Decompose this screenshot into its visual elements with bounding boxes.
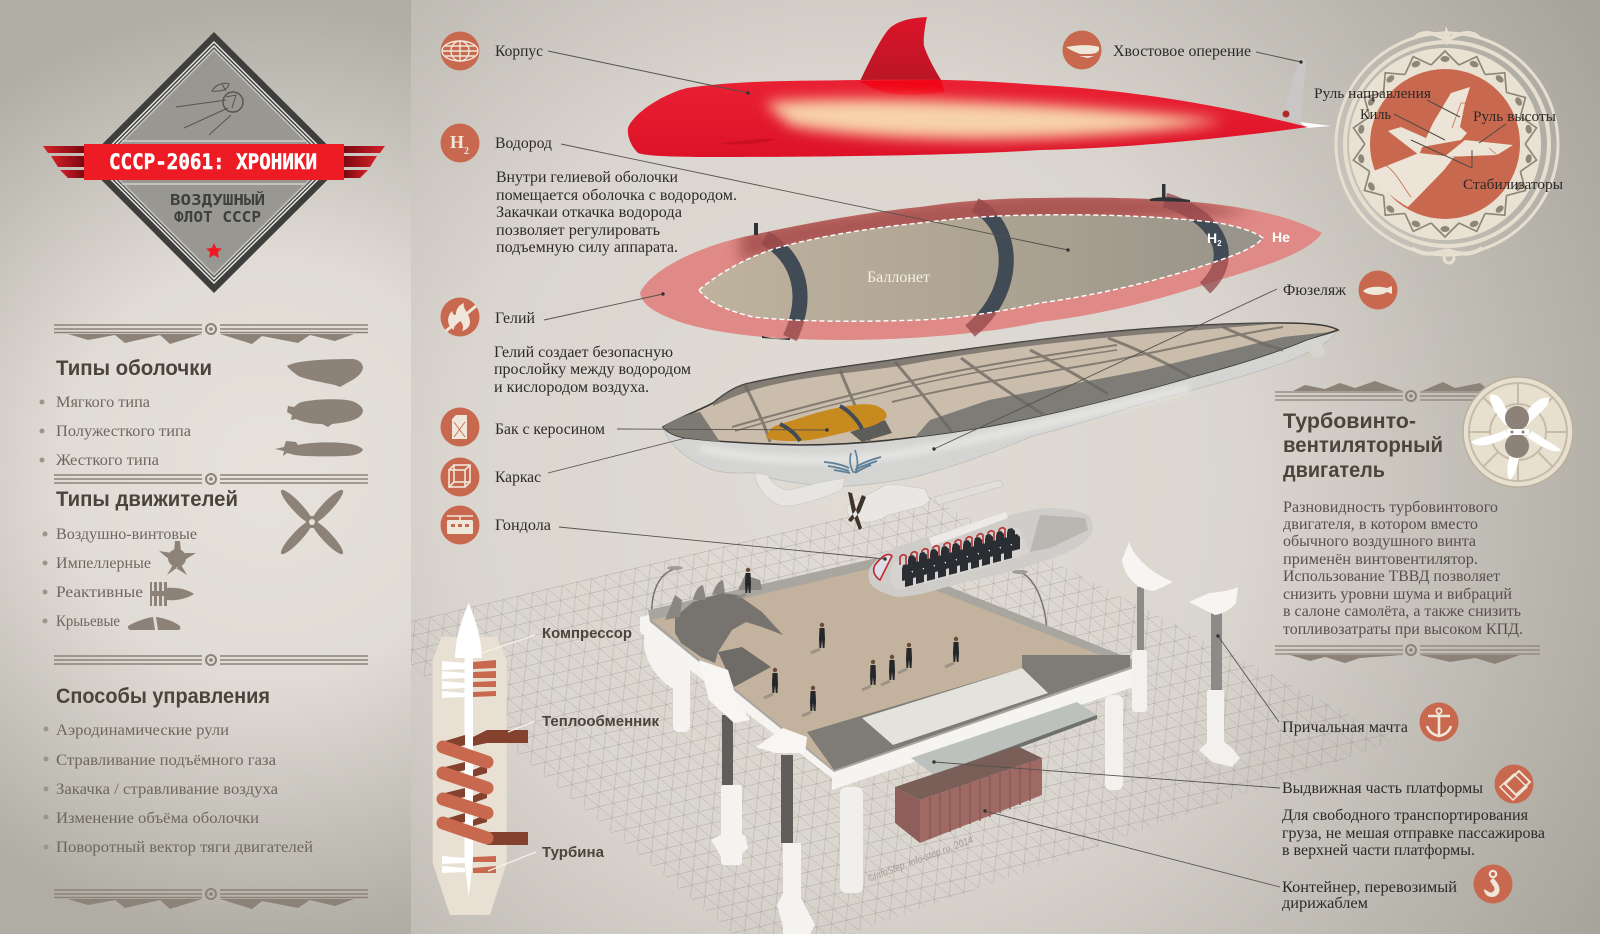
illustration: balloon envelope bbox=[640, 184, 1322, 340]
ballonet bbox=[699, 215, 1263, 321]
stern stub bbox=[1308, 344, 1325, 358]
heading: Турбовинто- bbox=[1283, 410, 1416, 433]
list: envelope types: Мягкого типа bbox=[56, 394, 150, 411]
subtitle: ВОЗДУШНЫЙ bbox=[170, 190, 265, 209]
description: Использование ТВВД позволяет bbox=[1283, 568, 1500, 585]
icon: red star bbox=[206, 243, 222, 258]
far-side mast heads bbox=[699, 660, 750, 723]
divider 3 bbox=[54, 655, 368, 665]
description: в салоне самолёта, а также снизить bbox=[1283, 603, 1521, 620]
floor bbox=[652, 567, 1130, 770]
people bbox=[737, 568, 959, 716]
leader lines bbox=[544, 51, 1301, 887]
callout: frame: Каркас bbox=[495, 469, 541, 486]
fin bbox=[860, 17, 941, 84]
icon: wing bbox=[128, 617, 180, 630]
callout: gondola bbox=[440, 506, 551, 544]
callout: hydrogen: Водород bbox=[495, 135, 552, 152]
diagram: engine scheme bbox=[433, 603, 659, 915]
white blades bbox=[442, 661, 465, 873]
description: двигателя, в котором вместо bbox=[1283, 516, 1478, 533]
envelope top shade bbox=[740, 192, 1250, 262]
list: propulsion types: Воздушно-винтовые bbox=[56, 526, 197, 543]
divider 1 bbox=[54, 324, 368, 344]
leader dots bbox=[661, 60, 1303, 813]
callout: helium: прослойку между водородом bbox=[494, 361, 691, 378]
icon: jet bbox=[150, 582, 194, 606]
callout: extendable platform: Для свободного транспортирования bbox=[1282, 807, 1528, 824]
icon: impeller bbox=[159, 541, 196, 575]
engine nacelle bbox=[847, 485, 930, 522]
escalator arches bbox=[665, 575, 762, 620]
illustration: platform bbox=[640, 542, 1240, 934]
label: H2: H bbox=[1207, 230, 1217, 246]
gondola bbox=[868, 508, 1093, 597]
callout: container bbox=[1282, 864, 1512, 912]
callout: mooring mast: Причальная мачта bbox=[1282, 719, 1408, 736]
zigzag ring bbox=[1351, 51, 1539, 237]
callout: fuselage bbox=[1283, 270, 1398, 310]
container bbox=[895, 746, 1042, 843]
badge labels: Руль направления bbox=[1314, 86, 1431, 102]
illustration: outer red hull bbox=[628, 17, 1331, 157]
badge labels: Руль высоты bbox=[1473, 109, 1556, 125]
callout: hydrogen: помещается оболочка с водородом. bbox=[496, 187, 737, 204]
hull highlight bbox=[765, 99, 1225, 139]
panel: turbofan engine bbox=[1275, 377, 1573, 664]
icon: propfan bbox=[1463, 377, 1573, 487]
ribbon bbox=[84, 144, 344, 180]
callout: helium: и кислородом воздуха. bbox=[494, 379, 649, 396]
emblem: diamond badge bbox=[43, 32, 385, 293]
description: Разновидность турбовинтового bbox=[1283, 499, 1498, 516]
mooring mast 2 bbox=[1211, 613, 1222, 693]
callout: hydrogen bbox=[440, 124, 737, 256]
fin shadow bbox=[860, 80, 945, 95]
list: envelope types: Полужесткого типа bbox=[56, 423, 191, 440]
hull shading bbox=[700, 388, 1190, 460]
callout: hydrogen: H bbox=[450, 132, 464, 152]
icon: semi-rigid airship bbox=[287, 399, 363, 427]
small pod bbox=[934, 480, 1004, 505]
callout: helium: Гелий bbox=[495, 310, 535, 327]
ribbon wings bbox=[43, 146, 385, 178]
rear leg bbox=[673, 660, 690, 732]
list: control methods: Стравливание подъёмного газа bbox=[56, 752, 276, 769]
fuel tank bbox=[766, 404, 892, 442]
description: снизить уровни шума и вибраций bbox=[1283, 586, 1512, 603]
divider 2 bbox=[54, 474, 368, 484]
platform slab edge bbox=[640, 560, 1142, 790]
tail fin bbox=[1283, 58, 1306, 122]
callout: extendable platform: Выдвижная часть платформы bbox=[1282, 780, 1484, 797]
icon: rigid airship bbox=[275, 441, 363, 456]
icon: soft airship bbox=[287, 359, 363, 387]
callout: kerosene tank: Бак с керосином bbox=[495, 421, 605, 438]
list: propulsion types: Крыьевые bbox=[56, 613, 120, 630]
list: envelope types bbox=[40, 394, 191, 469]
extendable slab bbox=[911, 702, 1097, 775]
callout lines bbox=[482, 635, 536, 871]
hull seam bbox=[720, 139, 778, 145]
ground grid bbox=[371, 497, 1398, 934]
list: control methods: Закачка / стравливание воздуха bbox=[56, 781, 278, 798]
heading: control methods: Способы управления bbox=[56, 685, 270, 708]
callout: container: Контейнер, перевозимый bbox=[1282, 879, 1457, 896]
badge: tail assembly bbox=[1314, 26, 1563, 263]
callout: extendable platform: в верхней части платформы. bbox=[1282, 842, 1475, 859]
masts bbox=[699, 542, 1240, 934]
heading bbox=[1283, 410, 1443, 482]
heat exchanger back bbox=[445, 735, 487, 826]
callout: frame bbox=[440, 458, 541, 496]
list: control methods bbox=[44, 722, 313, 856]
belts over ballonet bbox=[770, 216, 1229, 320]
propeller bbox=[848, 492, 866, 530]
badge leaders bbox=[1394, 100, 1506, 168]
callout: fuselage: Фюзеляж bbox=[1283, 282, 1346, 299]
callout: hull bbox=[440, 32, 543, 70]
label: turbine: Турбина bbox=[542, 844, 605, 861]
description: топливозатраты при высоком КПД. bbox=[1283, 621, 1523, 638]
list: propulsion types bbox=[42, 526, 197, 630]
divider top bbox=[1275, 381, 1490, 401]
label: heat exchanger: Теплообменник bbox=[542, 713, 659, 730]
callout: hydrogen: 2 bbox=[464, 146, 469, 157]
plane tail bbox=[1371, 87, 1513, 207]
heading: propulsion types: Типы движителей bbox=[56, 488, 238, 511]
description: применён винтовентилятор. bbox=[1283, 551, 1478, 568]
callout: hydrogen: подъемную силу аппарата. bbox=[496, 239, 678, 256]
callout: container: дирижаблем bbox=[1282, 895, 1368, 912]
shaft bbox=[455, 603, 482, 897]
callout: mooring mast bbox=[1282, 702, 1458, 742]
list: propulsion types: Импеллерные bbox=[56, 555, 151, 572]
far lamps bbox=[652, 568, 1047, 648]
description: обычного воздушного винта bbox=[1283, 533, 1476, 550]
description bbox=[1283, 499, 1523, 638]
hull body bbox=[628, 79, 1308, 157]
cargo opening bbox=[862, 668, 1048, 745]
icon: propeller bbox=[278, 487, 346, 557]
white hull bbox=[663, 323, 1338, 487]
callout: gondola: Гондола bbox=[495, 517, 551, 534]
gear arm bbox=[755, 473, 845, 506]
callout: helium bbox=[440, 298, 691, 396]
panel: main background bbox=[411, 0, 1600, 934]
subtitle: ФЛОТ СССР bbox=[174, 208, 261, 226]
belts over helium bbox=[765, 200, 1221, 338]
list: control methods: Аэродинамические рули bbox=[56, 722, 229, 739]
label: He: He bbox=[1272, 229, 1290, 245]
coil bbox=[443, 747, 487, 838]
divider bottom bbox=[1275, 645, 1540, 664]
seats bbox=[900, 528, 1020, 587]
callout: kerosene tank bbox=[440, 408, 605, 446]
leg front bbox=[840, 787, 863, 893]
callout: hydrogen: позволяет регулировать bbox=[496, 222, 660, 239]
canopy bbox=[675, 593, 783, 663]
canopy shadow bbox=[718, 647, 771, 687]
top mounts bbox=[754, 184, 1190, 340]
frame ribs bbox=[732, 327, 1283, 442]
list: control methods: Поворотный вектор тяги двигателей bbox=[56, 839, 313, 856]
badge labels: Стабилизаторы bbox=[1463, 177, 1563, 193]
illustration: fuselage bbox=[663, 323, 1338, 597]
panel: left sidebar bbox=[0, 0, 411, 934]
heading: двигатель bbox=[1283, 459, 1385, 482]
callout: hydrogen: Внутри гелиевой оболочки bbox=[496, 169, 678, 186]
tail plane bbox=[1300, 122, 1331, 128]
callout: tail: Хвостовое оперение bbox=[1113, 43, 1251, 60]
list: propulsion types: Реактивные bbox=[56, 584, 143, 601]
list: control methods: Изменение объёма оболочки bbox=[56, 810, 259, 827]
badge labels bbox=[1314, 86, 1563, 193]
callout: tail bbox=[1062, 30, 1251, 70]
mooring mast 1 bbox=[1137, 587, 1144, 652]
subtitle bbox=[170, 190, 265, 226]
interior shadow bbox=[915, 332, 1330, 437]
list: envelope types: Жесткого типа bbox=[56, 452, 159, 469]
icon: sputnik bbox=[176, 83, 243, 135]
title: СССР-2061: ХРОНИКИ bbox=[109, 150, 317, 174]
copyright: ©InfoStep, info-step.ru, 2014 bbox=[866, 834, 975, 885]
divider 4 bbox=[54, 889, 368, 909]
red blades bbox=[473, 660, 496, 873]
leg right bbox=[1105, 695, 1123, 790]
floor shadow bbox=[807, 655, 1130, 770]
callout: extendable platform bbox=[1282, 764, 1545, 859]
heading: вентиляторный bbox=[1283, 434, 1443, 457]
ornate frame bbox=[1336, 33, 1558, 263]
callout: hull: Корпус bbox=[495, 43, 543, 60]
callout: helium: Гелий создает безопасную bbox=[494, 344, 673, 361]
badge labels: Киль bbox=[1360, 107, 1391, 123]
aeroflot emblem bbox=[824, 450, 881, 473]
label: compressor: Компрессор bbox=[542, 625, 632, 642]
label: H2: 2 bbox=[1217, 239, 1222, 248]
label: ballonet: Баллонет bbox=[867, 269, 930, 286]
heading: envelope types: Типы оболочки bbox=[56, 357, 212, 380]
callout: extendable platform: груза, не мешая отправке пассажирова bbox=[1282, 825, 1545, 842]
interior bbox=[663, 323, 1338, 445]
callout: hydrogen: Закачкаи откачка водорода bbox=[496, 204, 682, 221]
